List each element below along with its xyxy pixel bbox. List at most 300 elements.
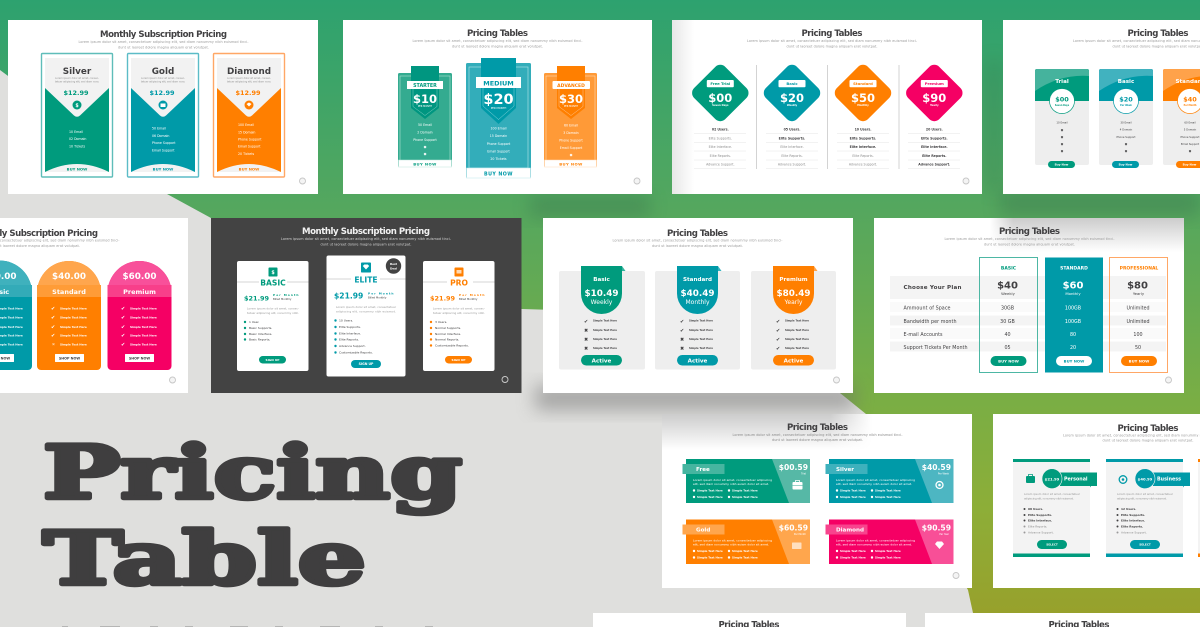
card: Silver: Simple Text Here — [875, 488, 901, 492]
card: Free: $00.59 — [779, 463, 808, 472]
card: Premium: Simple Text Here — [785, 337, 809, 341]
card: Premium arch: $60.00 — [123, 272, 156, 282]
card: Standard arch: ✔ — [51, 315, 55, 321]
card: Premium arch: Simple Text Here — [130, 342, 157, 346]
card: Premium: ✔ — [776, 337, 780, 343]
card: Personal: Lorem ipsum dolor sit amet, consectetuer — [1024, 492, 1081, 496]
card: Diamond: Lorem ipsum dolor sit amet, consec- — [227, 76, 271, 80]
card: Diamond: Email Support — [238, 144, 261, 148]
main title: Pricing Table: Table — [43, 516, 366, 602]
panel intro text: Lorem ipsum dolor sit amet, consectetuer adipiscing elit, sed diam nonummy nibh euismod tinci- — [78, 40, 249, 44]
card: Basic: ✖ — [584, 328, 588, 334]
card: Silver: Per Week — [938, 472, 950, 476]
card: Standard arch: ✖ — [52, 342, 55, 346]
plan: Free Trial: Elite Supports. — [709, 136, 732, 140]
card: Standard — [1163, 69, 1200, 168]
card: Gold: 50 Email — [152, 126, 166, 130]
card: Elite — [326, 256, 406, 376]
card: Advanced: 60 Email — [564, 124, 578, 128]
card: Standard: 5 Domain — [1184, 128, 1197, 132]
card: Business: SELECT — [1139, 542, 1151, 546]
card: Gold: $12.99 — [149, 89, 175, 97]
panel intro text — [0, 238, 120, 248]
card: Standard arch: ✔ — [51, 324, 55, 330]
plan: Premium: Elite Supports. — [921, 136, 948, 140]
column: Basic: BUY NOW — [998, 358, 1020, 364]
card: Trial: Buy Now — [1055, 162, 1069, 166]
column: Professional: 50 — [1135, 345, 1141, 351]
card: Elite: adipiscing elit, nonummy nibh euismod. — [336, 310, 396, 314]
page number icon — [300, 178, 306, 184]
card: Standard: Simple Text Here — [689, 318, 713, 322]
card: Premium: Simple Text Here — [785, 328, 809, 332]
plan: Standard: Elite Reports. — [852, 154, 874, 158]
card: Advanced: ADVANCED — [557, 83, 585, 89]
card: Premium: ✔ — [776, 328, 780, 334]
card: Personal: 08 Users. — [1028, 507, 1043, 511]
card: Trial: ✖ — [1060, 135, 1064, 139]
row labels: Bandwidth per month — [904, 319, 956, 325]
card: Personal: Elite Reports. — [1028, 524, 1047, 528]
column: Basic: 30 GB — [1000, 319, 1015, 325]
card: Silver: 02 Domain — [69, 137, 86, 141]
card: Business — [1106, 459, 1190, 557]
row labels: Choose Your Plan — [904, 285, 962, 291]
column: Professional: PROFESSIONAL — [1120, 266, 1158, 272]
plan: Free Trial: Advance Support. — [706, 162, 734, 166]
card: Basic: Weekly — [591, 299, 613, 306]
card: Advanced: 3 Domain — [563, 131, 579, 135]
column: Basic: $40 — [997, 280, 1018, 292]
plan: Standard: Advance Support. — [849, 162, 877, 166]
card: Gold: Lorem ipsum dolor sit amet, consec- — [141, 76, 185, 80]
card: Premium arch — [108, 261, 172, 370]
card: Silver: Lorem ipsum dolor sit amet, consec- — [55, 76, 99, 80]
card: Diamond: $90.59 — [922, 524, 951, 532]
card: Standard arch: Simple Text Here — [60, 316, 87, 320]
panel: cropped bottom left — [593, 613, 906, 627]
card: Premium: ✔ — [776, 346, 780, 352]
plan: Standard: $50 — [851, 91, 875, 105]
card: Diamond: $12.99 — [235, 89, 261, 97]
card: Medium: BUY NOW — [484, 172, 513, 178]
card: Advanced: ✖ — [569, 152, 573, 158]
card: Pro: Normal Supports. — [435, 326, 461, 330]
card: Basic: Simple Text Here — [593, 328, 617, 332]
card: Silver: Lorem ipsum dolor sit amet, consectetuer adipiscing — [836, 478, 915, 482]
card: Personal: Elite Interface. — [1028, 518, 1052, 522]
plan: Free Trial: Free Trial — [710, 81, 730, 86]
card: Basic: ✔ — [584, 319, 588, 325]
card: Pro: SIGN UP — [452, 358, 466, 362]
card: Basic: ✖ — [584, 337, 588, 343]
card: Personal: SELECT — [1046, 542, 1058, 546]
column: Basic: BASIC — [1001, 266, 1017, 272]
card: Premium arch: Simple Text Here — [130, 325, 157, 329]
badge: best deal: Best — [390, 262, 398, 266]
card: Silver — [42, 54, 112, 177]
panel: monthly subscription v-cards — [8, 20, 318, 194]
panel intro text — [1063, 434, 1200, 442]
card: Free: Lorem ipsum dolor sit amet, consectetuer adipiscing — [693, 478, 772, 482]
panel: tabbed pricing tables — [543, 218, 853, 393]
card: Pro: Normal Reports. — [435, 338, 459, 342]
card: Gold: Gold — [696, 528, 710, 534]
card: Silver: 10 Tickets — [69, 144, 85, 148]
card: Silver: 10 Email — [69, 130, 83, 134]
card: Gold — [682, 520, 810, 564]
column: Professional: 100 — [1133, 332, 1143, 338]
card: Diamond: 100 Email — [238, 123, 254, 127]
card: Medium — [466, 58, 531, 178]
card: Basic: $ — [271, 270, 275, 276]
card: Medium: PER MONTH — [491, 106, 506, 110]
card: Basic: Basic Supports. — [249, 326, 272, 330]
card: Pro: 3 Users. — [435, 320, 447, 324]
card: Standard arch: Simple Text Here — [60, 325, 87, 329]
card: Premium — [751, 266, 836, 370]
panel intro text: dunt ut laoreet dolore magna aliquam erat volutpat. — [984, 242, 1075, 246]
card: Diamond — [214, 54, 284, 177]
card: Gold: BUY NOW — [153, 166, 174, 172]
card: Basic: Per Month — [273, 293, 300, 297]
card: Standard: Per Month — [1184, 104, 1197, 107]
card: Silver: Silver — [836, 467, 854, 473]
panel heading: Pricing Tables — [667, 229, 728, 239]
panel: cropped bottom right — [925, 613, 1200, 627]
plan: Standard: Monthly — [857, 103, 869, 107]
card: Standard arch: ✔ — [51, 333, 55, 339]
panel intro text — [78, 40, 249, 50]
card: Basic: BASIC — [260, 278, 286, 288]
card: Silver: BUY NOW — [67, 166, 88, 172]
card: Silver: $12.99 — [63, 89, 89, 97]
card: Advanced: Email Support — [560, 146, 583, 150]
card: Premium arch: SHOP NOW — [129, 356, 150, 360]
card: Gold: Phone Support — [152, 141, 176, 145]
panel intro text — [732, 433, 903, 442]
card: Free: Simple Text Here — [697, 488, 723, 492]
card: Standard arch: Simple Text Here — [60, 334, 87, 338]
card: Advanced: $30 — [559, 92, 583, 106]
card: Business: Business — [1157, 476, 1181, 482]
card: Medium: MEDIUM — [483, 80, 514, 88]
column: Basic: 30GB — [1001, 306, 1014, 312]
card: Standard: 60 Email — [1184, 120, 1196, 124]
plan: Premium — [903, 62, 965, 169]
card: Silver: $40.59 — [922, 463, 951, 472]
card: Diamond: Simple Text Here — [875, 549, 901, 553]
card: Diamond: Phone Support — [238, 138, 262, 142]
page number icon — [953, 572, 959, 578]
table rows — [890, 276, 1166, 352]
card: Pro: Billed Monthly — [459, 297, 478, 301]
card: Advanced — [544, 66, 597, 167]
row labels: E-mail Accounts — [904, 332, 943, 338]
panel: horizontal plan cards — [662, 414, 972, 588]
card: Gold: Simple Text Here — [697, 549, 723, 553]
card: Elite: Customizable Reports. — [339, 350, 373, 354]
card: Basic: $21.99 — [244, 294, 270, 302]
column: Basic: 40 — [1004, 332, 1011, 338]
panel heading: Pricing Tables — [787, 423, 848, 433]
row labels: Ammount of Space — [904, 306, 951, 312]
card: Silver: elit, sed diam nonummy nibh euism dolor sit amet. — [836, 482, 912, 486]
card: Basic: $20 — [1119, 96, 1133, 104]
card: Free — [682, 459, 810, 503]
card: Personal: Personal — [1064, 476, 1088, 482]
card: Premium arch: ✔ — [121, 315, 125, 321]
card: Standard arch: $40.00 — [52, 272, 86, 282]
card: Basic: Basic — [593, 277, 610, 283]
card: Basic: Simple Text Here — [593, 346, 617, 350]
card: Standard arch — [37, 261, 101, 370]
panel intro text: Lorem ipsum dolor sit amet, consectetuer adipiscing elit, sed diam nonummy nibh euismod tinci- — [612, 238, 783, 242]
column: Basic — [980, 258, 1038, 372]
card: Elite: ELITE — [354, 276, 378, 284]
card: Pro: $21.99 — [430, 294, 456, 302]
plan: Basic: Advance Support. — [778, 162, 806, 166]
card: Standard arch: SHOP NOW — [59, 356, 80, 360]
card: Medium: 15 Domain — [490, 134, 507, 138]
card: Diamond: Simple Text Here — [840, 556, 866, 560]
plan: Premium: $90 — [922, 91, 946, 105]
panel: arch pricing cards — [0, 218, 188, 393]
panel: circle-price pricing tables — [1003, 20, 1200, 194]
panel intro text — [612, 238, 783, 248]
panel intro text: dunt ut laoreet dolore magna aliquam erat volutpat. — [452, 44, 543, 48]
card: Standard: Simple Text Here — [689, 346, 713, 350]
card: Standard: ✖ — [680, 346, 684, 352]
card: Basic: Simple Text Here — [593, 337, 617, 341]
card: Pro: Normal Interface. — [435, 332, 461, 336]
plan: Basic: 05 Users. — [784, 128, 800, 132]
card: Pro: Per Month — [459, 293, 486, 297]
card: Gold: elit, sed diam nonummy nibh euism dolor sit amet. — [693, 542, 769, 546]
panel intro text: dunt ut laoreet dolore magna aliquam erat volutpat. — [118, 46, 209, 50]
card: Elite: $21.99 — [334, 292, 363, 300]
card: Diamond: Diamond — [227, 67, 271, 77]
panel intro text: Lorem ipsum dolor sit amet, consectetuer adipiscing elit, sed diam nonummy nibh euismod tinci- — [281, 237, 452, 241]
card: Silver — [826, 459, 954, 503]
card: Premium arch: Simple Text Here — [130, 334, 157, 338]
card: Basic — [1099, 69, 1153, 168]
card: Premium: Active — [784, 358, 804, 364]
main title: Pricing Table — [43, 430, 462, 602]
plan: Basic: $20 — [780, 91, 804, 105]
card: Free: elit, sed diam nonummy nibh euism dolor sit amet. — [693, 482, 769, 486]
card: Basic: Basic — [1118, 79, 1134, 85]
column: Professional: $80 — [1127, 280, 1148, 292]
card: Diamond: Simple Text Here — [840, 549, 866, 553]
card: Basic: Basic Interface. — [249, 332, 272, 336]
card: Trial: ✖ — [1060, 149, 1064, 153]
page number icon — [963, 178, 969, 184]
card: Pro: Lorem ipsum dolor sit amet, consec- — [433, 306, 485, 310]
page number icon — [170, 377, 176, 383]
card: Personal: $21.99 — [1045, 476, 1060, 482]
plan: Premium: Elite Reports. — [922, 154, 947, 158]
card: Gold — [128, 54, 198, 177]
card: Pro: tetuer adipiscing elit, nonummy nibh. — [433, 311, 485, 315]
card: Diamond: Simple Text Here — [875, 556, 901, 560]
card: Pro: Customizable Reports. — [435, 344, 469, 348]
card: Basic: 30 Email — [1120, 120, 1132, 124]
card: Standard: Active — [688, 358, 708, 364]
panel heading: Pricing Tables — [467, 29, 528, 39]
panel intro text — [281, 237, 452, 246]
card: Elite: Per Month — [368, 292, 395, 296]
card: Diamond: tetuer adipiscing elit, sed diam nonu — [227, 80, 271, 84]
page number icon — [634, 178, 640, 184]
card: Business: Advance Support. — [1121, 530, 1147, 534]
card: Standard: ✖ — [1188, 149, 1192, 153]
panel intro text — [747, 39, 918, 48]
panel: personal and business plans — [993, 414, 1200, 588]
card: Basic: Billed Monthly — [273, 297, 292, 301]
plan: Standard — [832, 62, 894, 169]
card: Standard: ✖ — [680, 337, 684, 343]
card: Advanced: Phone Support — [559, 138, 583, 142]
page number icon — [502, 376, 508, 382]
column: Professional: Yearly — [1133, 291, 1145, 296]
card: Gold: Simple Text Here — [732, 549, 758, 553]
plan: Standard: Elite Interface. — [850, 145, 876, 149]
card: Silver: $ — [75, 103, 79, 109]
column: Professional: Unlimited — [1126, 306, 1150, 312]
plan: Basic: Weekly — [787, 103, 797, 107]
card: Premium arch: Premium — [123, 288, 156, 296]
card: Advanced: BUY NOW — [559, 162, 583, 166]
plan: Basic: Elite Supports. — [779, 136, 805, 140]
column: Standard — [1045, 258, 1103, 372]
card: Elite: Advance Support. — [339, 344, 366, 348]
card: Basic: 1 User. — [249, 320, 259, 324]
panel intro text: dunt ut laoreet dolore magna aliquam erat volutpat. — [320, 242, 412, 246]
column: Standard: $60 — [1063, 280, 1083, 292]
column: Professional — [1110, 258, 1168, 372]
column: Basic: Weekly — [1001, 291, 1016, 296]
card: Starter: Phone Support — [413, 138, 437, 142]
column: Standard: Monthly — [1065, 291, 1081, 296]
card: Basic: Active — [592, 358, 612, 364]
column: Basic: 05 — [1004, 345, 1011, 351]
panel intro text: Lorem ipsum dolor sit amet, consectetuer adipiscing elit, sed diam nonummy nibh euismod tinci- — [944, 237, 1115, 241]
main title: Pricing Table: Pricing — [43, 430, 462, 516]
plan: Free Trial — [689, 62, 751, 169]
card: Trial — [1035, 69, 1089, 168]
card: Diamond: Per Year — [939, 533, 949, 536]
card: Personal: adipiscing elit, nonummy nibh euismod. — [1024, 496, 1074, 500]
plan: Basic — [761, 62, 823, 169]
card: Standard: $40 — [1183, 96, 1197, 104]
page number icon — [834, 377, 840, 383]
card: Basic — [559, 266, 645, 370]
card: Premium: Yearly — [784, 299, 803, 306]
card: Starter: ✖ — [423, 144, 427, 150]
card: Business: Elite Supports. — [1121, 513, 1145, 517]
card: Premium arch: ✔ — [121, 324, 125, 330]
card: Basic: ✖ — [1124, 142, 1128, 146]
plan: Premium: Premium — [925, 81, 944, 86]
card: Elite: Elite Supports. — [339, 325, 361, 329]
card: Elite: SIGN UP — [359, 362, 374, 366]
card: Business: Lorem ipsum dolor sit amet, consectetuer — [1117, 492, 1174, 496]
card: Advanced: PER MONTH — [564, 105, 578, 108]
card: Elite: Lorem ipsum dolor sit amet, consectetuer — [336, 305, 397, 309]
panel: dark monthly subscription — [211, 218, 522, 393]
card: Basic: Buy Now — [1119, 162, 1133, 166]
plan: Free Trial: Elite Interface. — [709, 145, 732, 149]
card: Premium: ✔ — [776, 319, 780, 325]
card: Standard: ✔ — [680, 319, 684, 325]
card: Diamond: 15 Domain — [238, 130, 255, 134]
card: Medium: Phone Support — [487, 142, 511, 146]
card: Standard arch: Simple Text Here — [60, 342, 87, 346]
panel intro text: dunt ut laoreet dolore magna aliquam erat volutpat. — [786, 44, 878, 48]
panel heading: Monthly Subscription Pricing — [302, 227, 430, 237]
card: Premium: Premium — [779, 277, 808, 283]
card: Trial: $00 — [1055, 96, 1069, 104]
plan: Premium: Elite Interface. — [921, 145, 948, 149]
card: Diamond — [826, 520, 954, 564]
card: Standard: Monthly — [685, 299, 710, 306]
panel intro text: dunt ut laoreet dolore magna aliquam erat volutpat. — [772, 438, 863, 442]
column: Standard: BUY NOW — [1064, 358, 1085, 364]
card: Premium: Simple Text Here — [785, 346, 809, 350]
card: Starter: $10 — [413, 92, 437, 106]
panel heading: Monthly Subscription Pricing — [100, 30, 227, 40]
card: Silver: tetuer adipiscing elit, sed diam nonu — [55, 80, 99, 84]
column: Professional: BUY NOW — [1129, 358, 1150, 364]
column: Standard: 80 — [1070, 332, 1076, 338]
card: Medium: 20 Tickets — [490, 157, 507, 161]
card: Pro: PRO — [450, 278, 468, 288]
panel heading: Pricing Tables — [1128, 29, 1188, 39]
panel: diamond pricing tables — [672, 20, 982, 194]
card: Silver: Simple Text Here — [840, 495, 866, 499]
card: Basic: ✖ — [1124, 149, 1128, 153]
card: Medium: $20 — [483, 92, 514, 108]
card: Premium arch: ✔ — [121, 306, 125, 312]
card: Trial: Seven Days — [1055, 104, 1070, 107]
card: Premium arch: ✔ — [121, 342, 125, 348]
badge: best deal — [386, 258, 401, 274]
card: Gold: Simple Text Here — [732, 556, 758, 560]
card: Pro — [423, 261, 494, 371]
card: Gold: Per Month — [794, 533, 806, 536]
card: Starter: BUY NOW — [413, 162, 437, 166]
card: Elite: Elite Reports. — [339, 338, 359, 342]
card: Personal: Advance Support. — [1028, 530, 1054, 534]
card: Standard: $40.49 — [681, 289, 714, 299]
card: Standard arch: Standard — [52, 288, 86, 296]
column: Standard: STANDARD — [1060, 266, 1088, 272]
card: Basic: Phone Support — [1116, 135, 1136, 139]
card: Gold: tetuer adipiscing elit, sed diam nonu — [141, 80, 185, 84]
panel intro text: Lorem ipsum dolor sit amet, consectetuer adipiscing elit, sed diam nonummy nibh euismod tinci- — [732, 433, 903, 437]
card: Personal: Elite Supports. — [1028, 513, 1052, 517]
card: Business: Elite Reports. — [1121, 524, 1143, 528]
card edge: third plan — [1198, 459, 1200, 557]
plan: Premium: Yearly — [929, 103, 939, 107]
panel heading: Pricing Tables — [802, 29, 862, 39]
card: Standard: Email Support — [1181, 142, 1199, 146]
card: Basic — [237, 261, 308, 371]
column: Standard: 100GB — [1065, 306, 1081, 312]
card: Silver: Simple Text Here — [875, 495, 901, 499]
card: Standard: Simple Text Here — [689, 328, 713, 332]
